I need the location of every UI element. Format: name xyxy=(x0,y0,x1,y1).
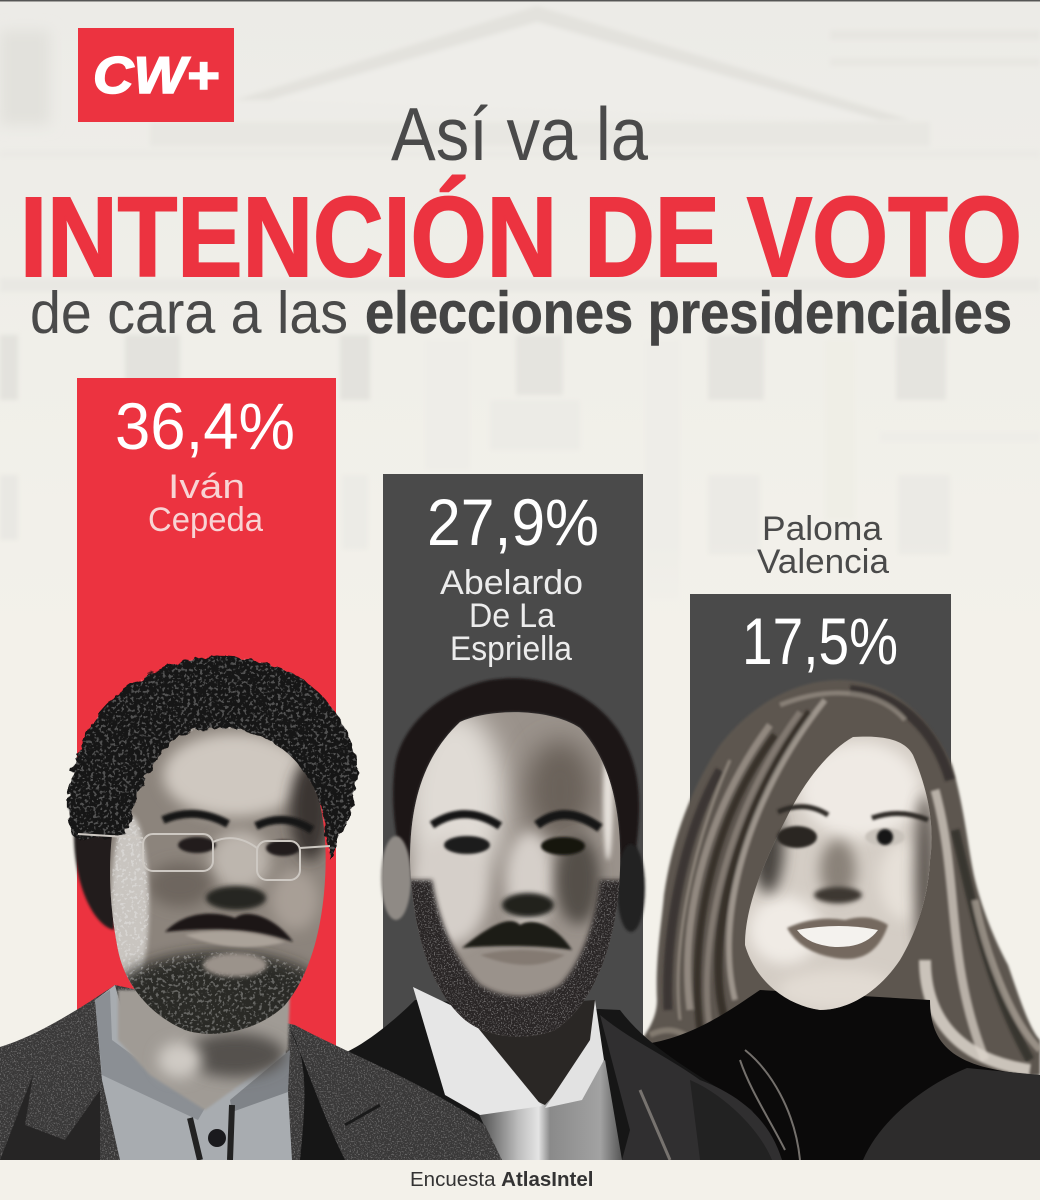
name: Iván Cepeda: Iván xyxy=(168,468,245,506)
value: 36,4%: 36,4% xyxy=(115,389,295,463)
name: Abelardo De La Espriella: Abelardo xyxy=(440,564,583,602)
bar: Abelardo De La Espriella xyxy=(383,474,643,1074)
shirt xyxy=(95,985,292,1160)
name: Paloma Valencia: Valencia xyxy=(757,543,889,581)
bar: Paloma Valencia xyxy=(690,594,951,1094)
neck xyxy=(118,990,290,1110)
portrait: Paloma Valencia xyxy=(637,680,1040,1160)
name: Abelardo De La Espriella xyxy=(440,564,583,668)
face xyxy=(110,727,326,1034)
background: faded congress building xyxy=(0,2,1040,642)
subtitle: de cara a las xyxy=(30,280,348,346)
value: 17,5%: 17,5% xyxy=(742,604,898,678)
name: Iván Cepeda: Cepeda xyxy=(148,501,263,539)
shirt and collar xyxy=(478,1060,622,1160)
top edge line xyxy=(0,0,1040,2)
bar: Iván Cepeda xyxy=(77,378,336,1068)
footer: Encuesta AtlasIntel xyxy=(0,1160,1040,1200)
portrait: Abelardo De La Espriella xyxy=(340,678,782,1160)
glasses xyxy=(78,834,330,880)
logo: CW+ xyxy=(78,28,234,122)
title: Así va la: Así va la xyxy=(391,92,648,176)
jacket xyxy=(0,985,502,1160)
logo: CW+: CW+ xyxy=(93,47,219,105)
hair xyxy=(393,678,639,880)
name: Iván Cepeda xyxy=(148,468,263,539)
ear xyxy=(74,825,120,930)
name: Abelardo De La Espriella: Espriella xyxy=(450,630,572,668)
portrait: Iván Cepeda xyxy=(0,657,502,1160)
name: Paloma Valencia: Paloma xyxy=(762,510,882,548)
subtitle xyxy=(30,280,1012,346)
beard xyxy=(405,880,628,1045)
name: Paloma Valencia xyxy=(757,510,889,581)
face xyxy=(745,736,932,1010)
footer: Encuesta AtlasIntel: Encuesta AtlasIntel xyxy=(410,1168,593,1191)
hair xyxy=(68,657,357,860)
value: 27,9%: 27,9% xyxy=(427,485,599,559)
brows and eyes xyxy=(163,814,312,830)
name: Abelardo De La Espriella: De La xyxy=(469,597,555,635)
